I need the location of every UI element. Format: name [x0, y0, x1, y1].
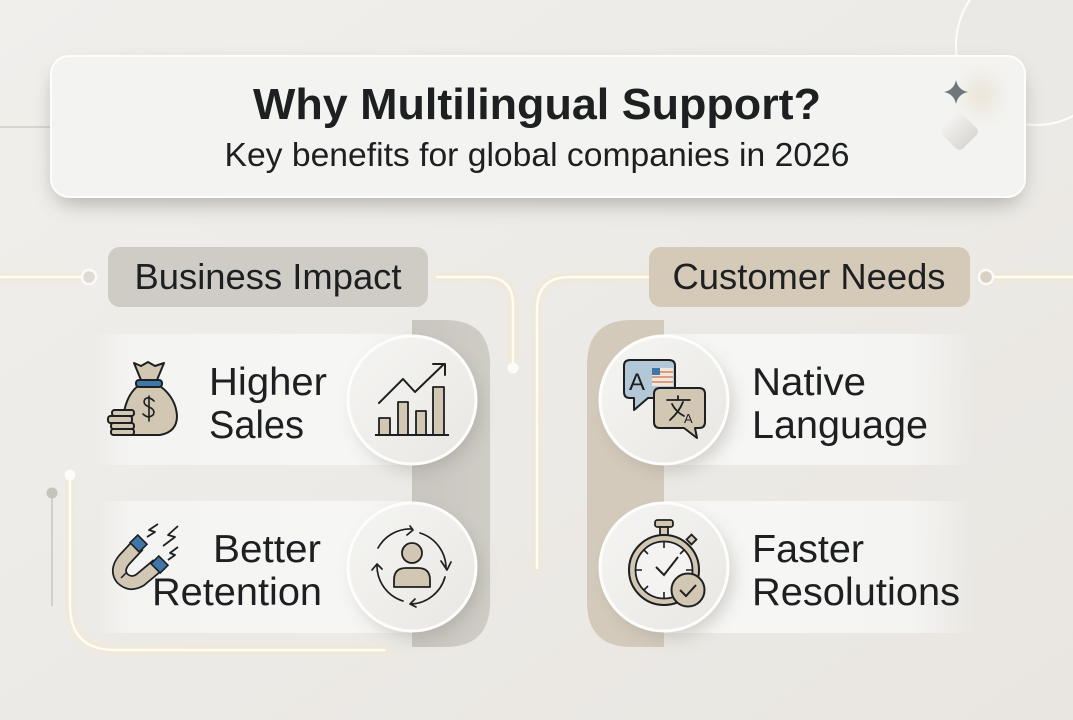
badge: translation bubbles: A	[629, 369, 645, 396]
panel: business impact	[96, 247, 490, 647]
heading pill: business impact: Business Impact	[134, 256, 402, 297]
icon: sparkle and diamond	[939, 76, 999, 152]
row: faster resolutions	[600, 501, 974, 637]
label: faster resolutions: Resolutions	[752, 571, 960, 614]
row: higher sales	[96, 334, 480, 470]
label: better retention: Better	[213, 528, 321, 571]
row: better retention	[96, 501, 480, 637]
label: faster resolutions	[752, 528, 960, 614]
side band	[587, 320, 664, 647]
label: faster resolutions: Faster	[752, 528, 864, 571]
badge: stopwatch	[600, 503, 732, 637]
label: native language	[752, 361, 928, 447]
badge: customer cycle	[348, 503, 480, 637]
top-left connector line	[0, 126, 52, 128]
label: higher sales: Higher	[209, 361, 327, 404]
label: higher sales	[209, 361, 327, 447]
label: higher sales: Sales	[209, 404, 304, 447]
panel: customer needs	[587, 247, 974, 647]
label: better retention	[152, 528, 322, 614]
title card	[51, 56, 1025, 204]
subtitle: Key benefits for global companies in 2026	[224, 136, 850, 173]
label: native language: Language	[752, 404, 928, 447]
title: Why Multilingual Support?	[253, 80, 821, 129]
icon: magnet	[119, 524, 178, 583]
heading pill: customer needs: Customer Needs	[672, 256, 946, 297]
badge: translation bubbles: A	[684, 411, 693, 426]
side band	[412, 320, 490, 647]
connector nodes	[46, 270, 993, 606]
icon: money bag	[108, 362, 177, 435]
label: native language: Native	[752, 361, 866, 404]
heading pill: customer needs	[649, 247, 970, 307]
label: better retention: Retention	[152, 571, 322, 614]
badge: growth chart	[348, 336, 480, 470]
row: native language	[600, 334, 974, 470]
heading pill: business impact	[108, 247, 428, 307]
badge: translation bubbles	[600, 336, 732, 470]
decorative top-right ring	[956, 0, 1073, 125]
glowing connectors	[0, 277, 1073, 650]
